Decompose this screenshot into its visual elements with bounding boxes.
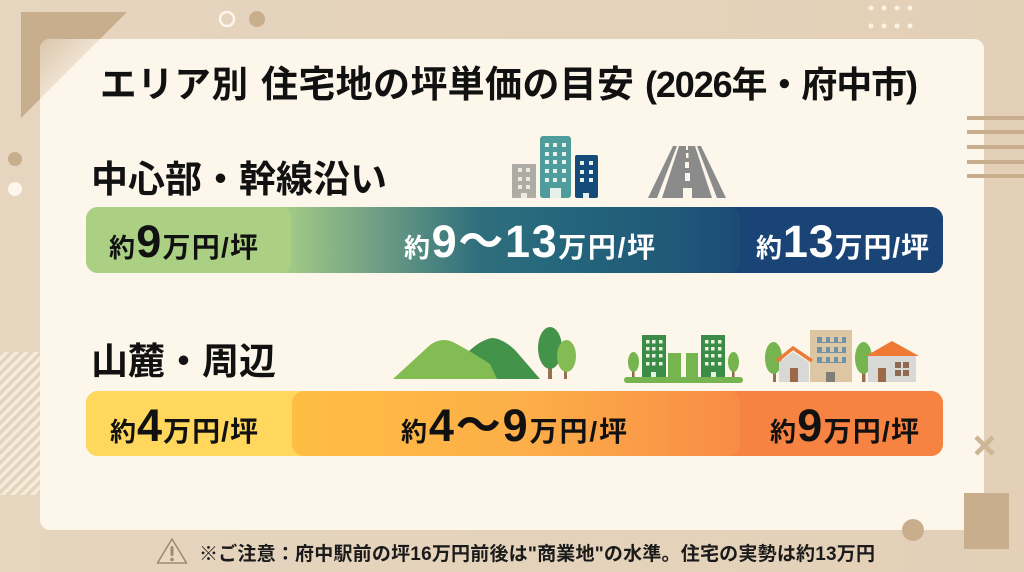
panel: main card (40, 39, 984, 530)
label: about 4: 約4万円/坪 (110, 400, 258, 451)
decoration: bottom right square and circle (902, 493, 1009, 549)
footnote: ※ご注意：府中駅前の坪16万円前後は"商業地"の水準。住宅の実勢は約13万円 (199, 542, 875, 565)
icon: mountains (393, 338, 540, 379)
decoration: triangle overlap on card (40, 39, 100, 99)
segment: low end (86, 391, 304, 456)
bar: foothills price range (86, 391, 943, 456)
bar: central area price range (86, 207, 943, 273)
label: about 9 to 13: 約9～13万円/坪 (404, 216, 655, 267)
decoration: dot grid (868, 6, 912, 28)
label: about 9: 約9万円/坪 (109, 216, 258, 267)
title: 住宅地の坪単価の目安 (261, 64, 634, 105)
segment: high end (728, 391, 943, 456)
label: about 4 to 9: 約4～9万円/坪 (401, 400, 627, 451)
decoration: right lines (967, 116, 1024, 178)
segment: high end (730, 207, 943, 273)
icon: trees (538, 327, 576, 379)
title: (2026年・府中市) (645, 64, 918, 105)
decoration: top circles (220, 11, 265, 27)
segment: low end (86, 207, 291, 273)
decoration: striped block (0, 352, 40, 495)
heading: foothills area: 山麓・周辺 (91, 341, 276, 382)
icon: highway (648, 146, 726, 198)
heading: central area: 中心部・幹線沿い (91, 159, 387, 200)
title: エリア別 (100, 64, 248, 105)
label: about 13: 約13万円/坪 (756, 216, 929, 267)
icon: city buildings (512, 136, 598, 198)
decoration: left circles (8, 152, 22, 196)
icon: green office buildings (624, 335, 743, 383)
decoration: cross mark (976, 437, 993, 454)
decoration: corner triangle (21, 12, 127, 118)
icon: houses and apartment (765, 330, 919, 382)
icon: warning triangle (158, 539, 186, 563)
title (100, 64, 918, 105)
label: about 9: 約9万円/坪 (770, 400, 919, 451)
